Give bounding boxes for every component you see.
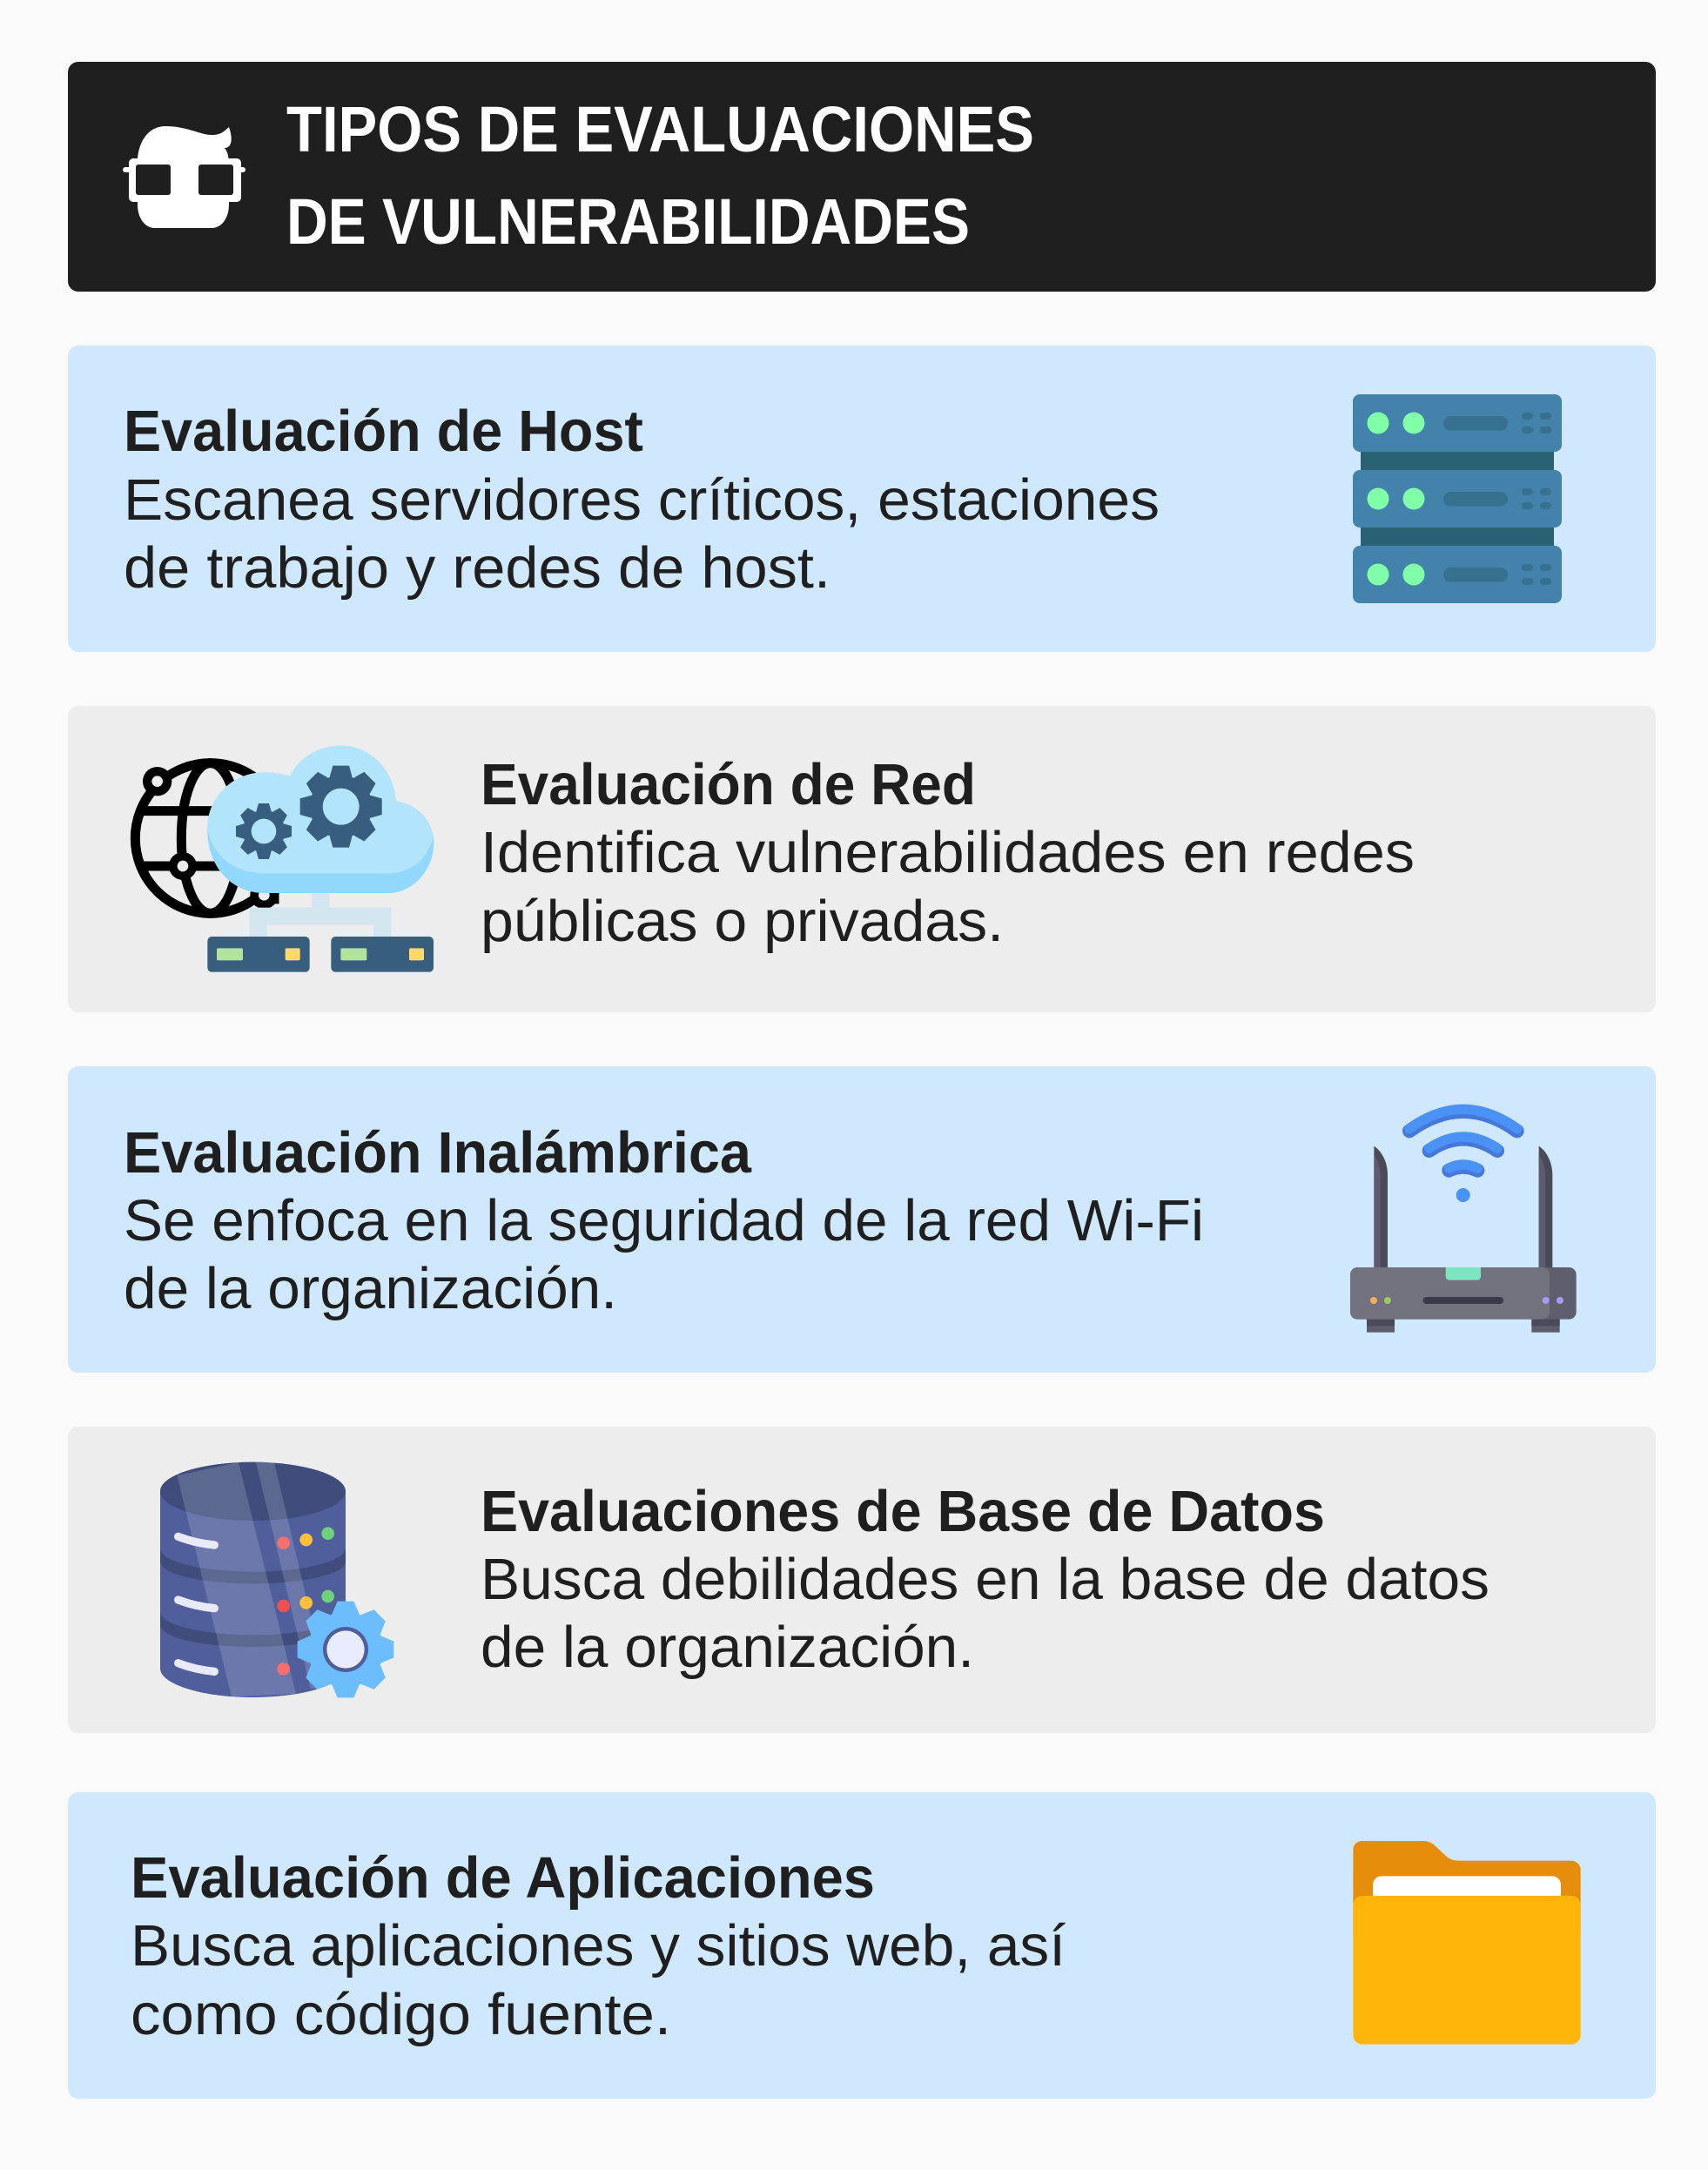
panel: Evaluaciones de Base de Datos [68, 1427, 1656, 1733]
icon: nerd head with glasses [123, 126, 245, 228]
text block: host: Evaluación de Host [124, 399, 643, 464]
icon: wifi router [1350, 1109, 1577, 1333]
title: DE VULNERABILIDADES [286, 185, 970, 258]
icon: server rack [1353, 394, 1562, 603]
text block: aplicaciones: Busca aplicaciones y sitios web, así [131, 1913, 1066, 1979]
panel: Evaluación de Host [68, 346, 1656, 652]
icon part: connectors [250, 888, 391, 937]
text block: red [481, 752, 1415, 954]
text block: base de datos: Evaluaciones de Base de Datos [481, 1479, 1325, 1544]
panel: Evaluación Inalámbrica [68, 1066, 1656, 1373]
icon part: body [1350, 1267, 1577, 1320]
text block: inalámbrica: de la organización. [124, 1256, 617, 1321]
icon part: status lights [277, 1527, 334, 1676]
text block: inalámbrica [124, 1120, 1204, 1321]
text block: red: públicas o privadas. [481, 889, 1004, 954]
icon part: big gear [300, 766, 382, 848]
icon part: feet [1367, 1317, 1560, 1333]
text block: host: de trabajo y redes de host. [124, 535, 830, 601]
text block: base de datos: Busca debilidades en la base de datos [481, 1547, 1489, 1612]
text block: inalámbrica: Se enfoca en la seguridad de la red Wi-Fi [124, 1188, 1204, 1253]
title [286, 93, 1034, 258]
panel: Evaluación de Aplicaciones [68, 1792, 1656, 2099]
title: TIPOS DE EVALUACIONES [286, 93, 1034, 165]
icon part: gear [298, 1602, 393, 1697]
icon part: globe [135, 763, 286, 913]
text block: aplicaciones: como código fuente. [131, 1982, 671, 2047]
icon part: antennas [1374, 1146, 1552, 1269]
text block: host [124, 399, 1160, 601]
icon part: servers [207, 937, 434, 972]
text block: red: Identifica vulnerabilidades en redes [481, 820, 1415, 885]
text block: base de datos: de la organización. [481, 1615, 974, 1680]
icon: globe, cloud with gears and servers [135, 746, 434, 972]
panel: Evaluación de Red [68, 706, 1656, 1012]
panel: header [68, 62, 1656, 292]
icon: database with gear [160, 1462, 393, 1697]
text block: red: Evaluación de Red [481, 752, 976, 817]
text block: aplicaciones [131, 1845, 1066, 2047]
text block: host: Escanea servidores críticos, estaciones [124, 467, 1160, 533]
icon: folder [1353, 1841, 1581, 2045]
text block: inalámbrica: Evaluación Inalámbrica [124, 1120, 752, 1186]
icon part: wifi signal [1409, 1109, 1517, 1171]
icon part: cloud [207, 746, 434, 893]
icon part: highlights [178, 1536, 214, 1671]
text block: base de datos [481, 1479, 1489, 1680]
text block: aplicaciones: Evaluación de Aplicaciones [131, 1845, 875, 1911]
icon part: small gear [236, 803, 292, 859]
icon part: cylinder [160, 1462, 346, 1697]
